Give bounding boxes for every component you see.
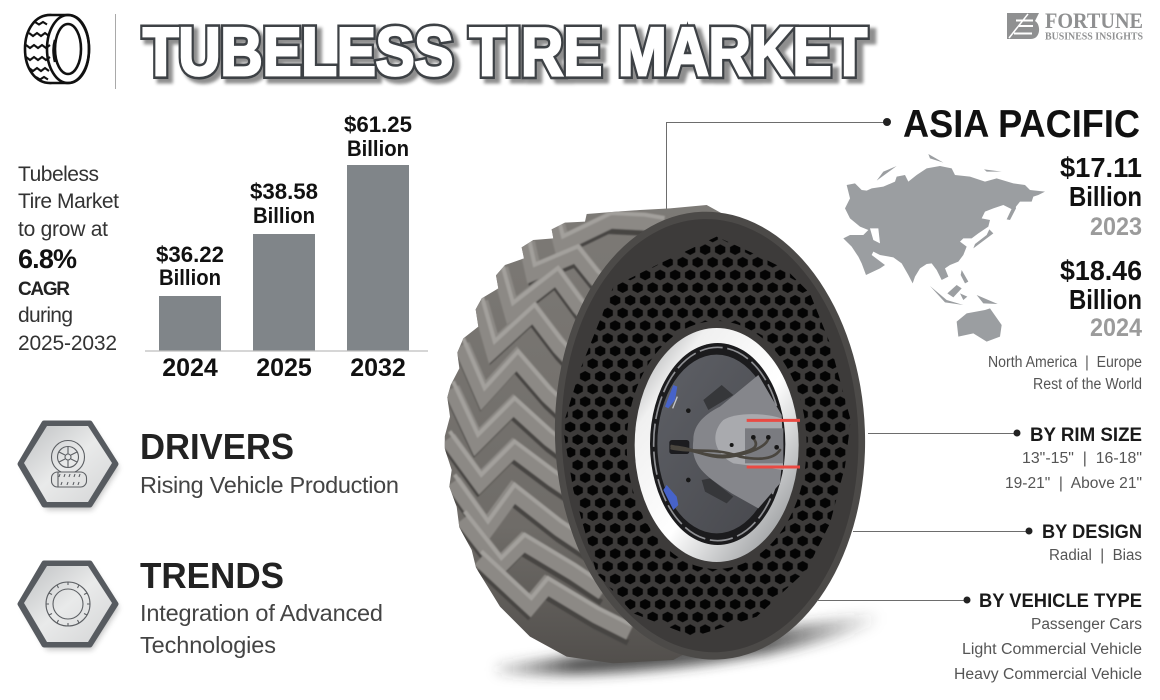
bar chart: market size: 2024	[162, 354, 218, 382]
segment: by rim size	[868, 424, 1142, 492]
bar chart: market size: $36.22	[156, 242, 224, 267]
logo: Fortune Business Insights: FORTUNE	[1045, 8, 1143, 33]
text block: other regions: Rest of the World	[1033, 376, 1142, 393]
bar chart: market size: Billion	[159, 265, 221, 290]
hub	[635, 328, 800, 562]
segment: by design	[853, 521, 1142, 564]
segment: by vehicle type: Light Commercial Vehicle	[962, 641, 1142, 658]
bar chart: market size	[145, 112, 428, 382]
stats: Asia Pacific values: 2024	[1090, 314, 1142, 342]
tread body	[440, 200, 740, 667]
stats: Asia Pacific values: Billion	[1069, 181, 1142, 212]
red leads	[747, 420, 800, 467]
heading: drivers: DRIVERS	[140, 426, 294, 467]
text block: CAGR statement: to grow at	[18, 218, 108, 241]
stats: Asia Pacific values: $17.11	[1060, 152, 1142, 183]
bar chart: market size: Billion	[347, 136, 409, 161]
bar chart: market size: $61.25	[344, 112, 412, 137]
heading: drivers: Rising Vehicle Production	[140, 472, 399, 498]
bar chart: market size: $38.58	[250, 179, 318, 204]
segment: by design: BY DESIGN	[1042, 521, 1142, 543]
icon: hexagon drivers	[20, 423, 119, 510]
stats: Asia Pacific values: 2023	[1090, 213, 1142, 241]
stats: Asia Pacific values	[1060, 152, 1142, 342]
stats: Asia Pacific values: $18.46	[1060, 255, 1142, 286]
segment: by vehicle type: Passenger Cars	[1031, 616, 1142, 633]
heading: trends: Integration of Advanced	[140, 600, 383, 626]
logo: Fortune Business Insights	[1007, 8, 1143, 42]
text block: CAGR statement: 6.8%	[18, 244, 77, 274]
stats: Asia Pacific values: Billion	[1069, 284, 1142, 315]
text block: CAGR statement: during	[18, 304, 73, 327]
text block: CAGR statement: 2025-2032	[18, 332, 117, 355]
segment: by vehicle type: BY VEHICLE TYPE	[979, 590, 1142, 612]
heading: trends: Technologies	[140, 632, 276, 658]
bar chart: market size: Billion	[253, 203, 315, 228]
bar chart: market size: 2032	[350, 354, 406, 382]
icon: hexagon trends	[20, 563, 119, 650]
text block: CAGR statement: Tubeless	[18, 163, 99, 186]
bar chart: market size: 2025	[256, 354, 312, 382]
segment: by vehicle type: Heavy Commercial Vehicle	[954, 666, 1142, 683]
ground shadow	[497, 612, 880, 675]
text block: other regions: North America | Europe	[988, 354, 1142, 371]
hub arm	[693, 375, 783, 508]
segment: by rim size: 13"-15" | 16-18"	[1022, 450, 1142, 467]
segment: by rim size: BY RIM SIZE	[1030, 424, 1142, 446]
title: TUBELESS TIRE MARKET	[143, 14, 867, 90]
title: TUBELESS TIRE MARKET	[147, 18, 873, 94]
text block: other regions	[988, 354, 1142, 393]
heading: drivers	[140, 426, 399, 498]
segment: by rim size: 19-21" | Above 21"	[1005, 475, 1142, 492]
text block: CAGR statement: Tire Market	[18, 190, 119, 213]
leader: Asia Pacific	[666, 118, 891, 210]
perforated holes	[563, 237, 851, 637]
text block: CAGR statement: CAGR	[18, 279, 70, 300]
icon: tire outline	[25, 15, 89, 83]
text block: CAGR statement	[18, 163, 119, 355]
segment: by vehicle type	[818, 590, 1142, 683]
slot	[669, 440, 689, 454]
title: TUBELESS TIRE MARKET	[143, 14, 867, 90]
heading: trends	[140, 555, 383, 658]
map: Asia Pacific	[843, 154, 1045, 342]
heading: trends: TRENDS	[140, 555, 284, 596]
logo: Fortune Business Insights: BUSINESS INSIGHTS	[1045, 32, 1143, 42]
blue accents	[663, 385, 678, 510]
wires	[672, 438, 780, 459]
gear teeth	[702, 385, 733, 503]
tire side wall	[547, 206, 873, 665]
heading: Asia Pacific: ASIA PACIFIC	[903, 103, 1140, 146]
segment: by design: Radial | Bias	[1049, 547, 1142, 564]
tire illustration	[440, 200, 880, 675]
